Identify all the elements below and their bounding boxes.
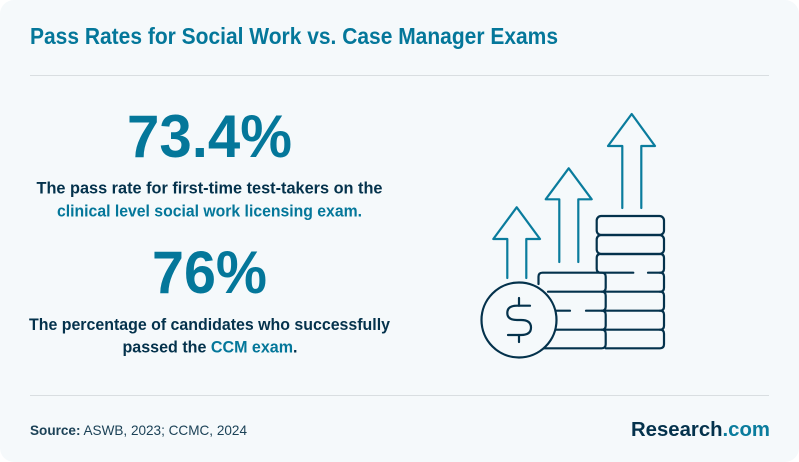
text block: social work pass rate: The pass rate for first-time test-takers on the [36,180,382,198]
text block: CCM pass rate: The percentage of candidates who successfully [29,316,391,334]
text block: social work pass rate: clinical level social work licensing exam. [57,202,362,220]
text block: CCM pass rate [29,316,391,356]
icon: coins with rising arrows [482,114,664,358]
title: Pass Rates for Social Work vs. Case Manager Exams [30,23,558,49]
icon: dollar coin [482,282,556,358]
source note: Source: ASWB, 2023; CCMC, 2024 [30,422,247,438]
icon: coin stacks [538,216,664,348]
logo: Research.com: Research.com [631,418,770,441]
stat: 73.4%: 73.4% [127,102,292,170]
icon: arrows [493,114,655,278]
text block: CCM pass rate: passed the CCM exam. [122,338,297,356]
stat: 76%: 76% [152,238,267,306]
text block: social work pass rate [36,180,382,220]
